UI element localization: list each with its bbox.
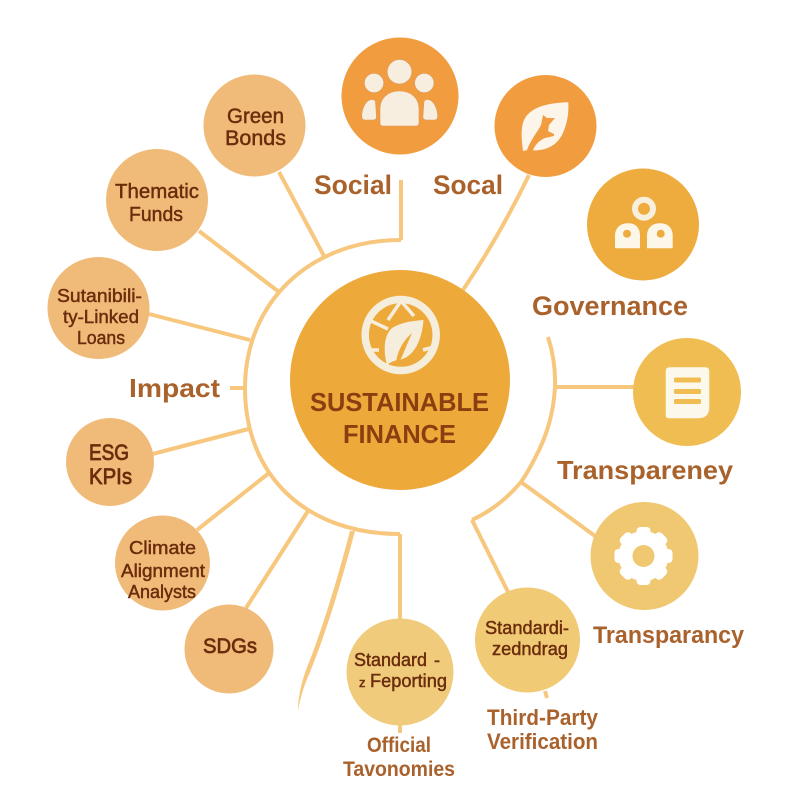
node: document icon — [633, 338, 741, 446]
node: Green Bonds — [204, 74, 306, 176]
node: Standardi-zedndrag: zedndrag — [492, 639, 568, 659]
node: Sustainability-Linked Loans: Sutanibili- — [57, 285, 142, 306]
hub title — [310, 387, 489, 449]
label: Third-Party Verification: Verification — [487, 729, 598, 754]
label: Social: Social — [314, 170, 392, 200]
node: gear icon — [590, 502, 698, 610]
label: Third-Party Verification — [487, 705, 599, 754]
connector network — [149, 172, 634, 733]
node: Standard reporting: Standard — [354, 650, 427, 670]
label: Impact: Impact — [129, 373, 220, 403]
label: Official Tavonomies — [343, 734, 455, 781]
node: Green Bonds: Bonds — [225, 127, 286, 150]
node: Standard reporting: z — [359, 675, 366, 690]
node: Thematic Funds: Thematic — [115, 181, 199, 203]
node: Standardi-zedndrag — [475, 588, 580, 692]
hub title: SUSTAINABLE — [310, 387, 489, 417]
node: ESG KPIs: KPIs — [89, 464, 132, 489]
node: Green Bonds: Green — [227, 105, 284, 128]
node: Climate Alignment Analysts: Alignment — [121, 560, 205, 581]
label: Transpareney: Transpareney — [557, 455, 734, 485]
label: Official Tavonomies: Tavonomies — [343, 758, 455, 781]
hub title: FINANCE — [343, 419, 456, 449]
central hub: sustainable finance — [290, 270, 510, 490]
node: Sustainability-Linked Loans: Loans — [77, 327, 125, 348]
label: Third-Party Verification: Third-Party — [487, 705, 599, 730]
node: leaf icon — [494, 75, 596, 177]
node: Standard reporting: Feporting — [370, 671, 447, 691]
label: Governance: Governance — [532, 291, 688, 321]
node: Sustainability-Linked Loans — [48, 257, 150, 359]
icon: leaf globe emblem — [365, 300, 436, 370]
node: Standardi-zedndrag: Standardi- — [485, 618, 569, 638]
node: Standard reporting — [346, 618, 454, 726]
node: Climate Alignment Analysts: Analysts — [128, 581, 196, 602]
node: Sustainability-Linked Loans: ty-Linked — [63, 306, 139, 327]
node: Climate Alignment Analysts — [115, 516, 210, 610]
label: Official Tavonomies: Official — [367, 734, 431, 757]
node: ESG KPIs — [66, 418, 154, 506]
node: governance icon — [587, 168, 699, 280]
node: SDGs: SDGs — [203, 635, 257, 658]
node: Thematic Funds — [106, 149, 208, 251]
node: SDGs — [184, 604, 274, 694]
node: Standard reporting: - — [434, 650, 440, 670]
label: Transparancy: Transparancy — [593, 622, 745, 649]
node: Thematic Funds: Funds — [129, 204, 183, 226]
node: ESG KPIs: ESG — [89, 440, 129, 465]
label: Socal: Socal — [433, 170, 503, 200]
node: Climate Alignment Analysts: Climate — [129, 537, 196, 558]
node: social people icon — [342, 38, 458, 154]
